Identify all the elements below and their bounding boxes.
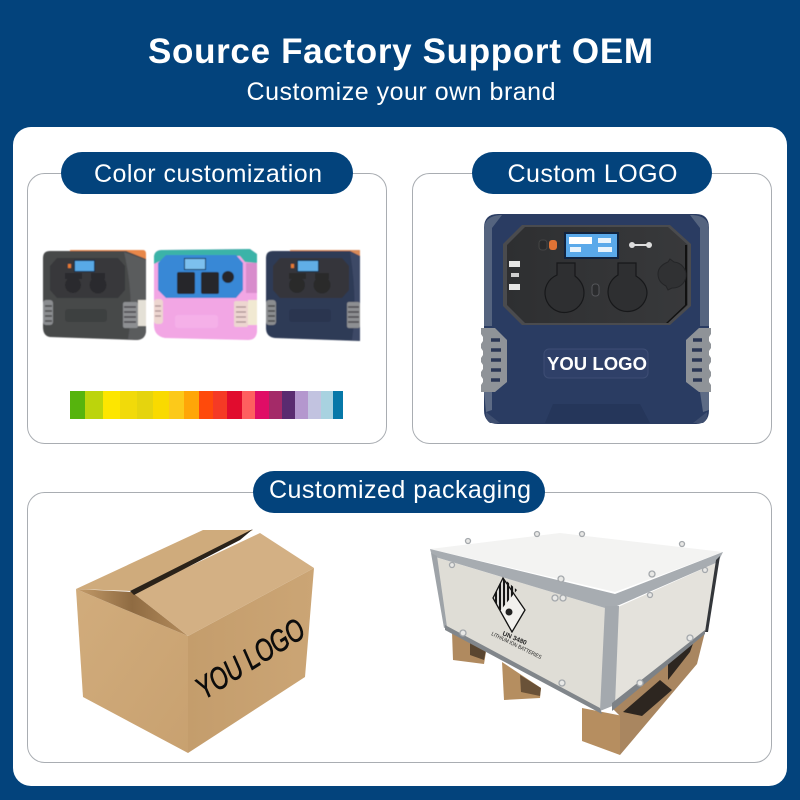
logo plate: YOU LOGO <box>547 353 647 374</box>
heading pill: color customization <box>61 152 353 194</box>
dc port cap <box>658 259 686 290</box>
color swatch strip <box>70 391 343 419</box>
crate front face <box>435 557 605 710</box>
socket right <box>608 263 647 312</box>
subtitle: Customize your own brand <box>246 78 556 106</box>
label text line two: LITHIUM ION BATTERIES <box>490 631 542 661</box>
control panel <box>503 225 691 325</box>
panel: customized packaging <box>28 471 772 762</box>
cardboard box <box>76 529 314 753</box>
panel: color customization <box>28 152 386 444</box>
crate right face <box>612 562 718 705</box>
box logo text: YOU LOGO <box>189 612 311 706</box>
product: navy power station <box>266 250 360 341</box>
side handle right <box>686 328 711 392</box>
pallet blocks <box>452 632 705 755</box>
lcd screen <box>564 232 619 259</box>
panel: custom logo <box>412 152 772 444</box>
hazard label <box>493 576 525 632</box>
heading pill: custom logo <box>472 152 712 194</box>
heading pill: customized packaging: Customized packaging <box>269 476 531 504</box>
label text: UN 3480 <box>501 630 528 647</box>
product: grey power station <box>43 250 146 340</box>
socket left <box>545 263 584 312</box>
title: Source Factory Support OEM <box>148 32 653 71</box>
logo plate <box>544 349 648 378</box>
crate lid <box>430 533 723 592</box>
side handle left <box>481 328 507 392</box>
heading pill: custom logo: Custom LOGO <box>508 160 678 188</box>
product: navy power station with logo <box>481 214 711 424</box>
heading pill: customized packaging <box>253 471 545 513</box>
main white card <box>13 127 787 786</box>
wooden crate on pallet <box>430 532 723 755</box>
product: pink and blue power station <box>154 249 257 340</box>
heading pill: color customization: Color customization <box>94 160 322 188</box>
